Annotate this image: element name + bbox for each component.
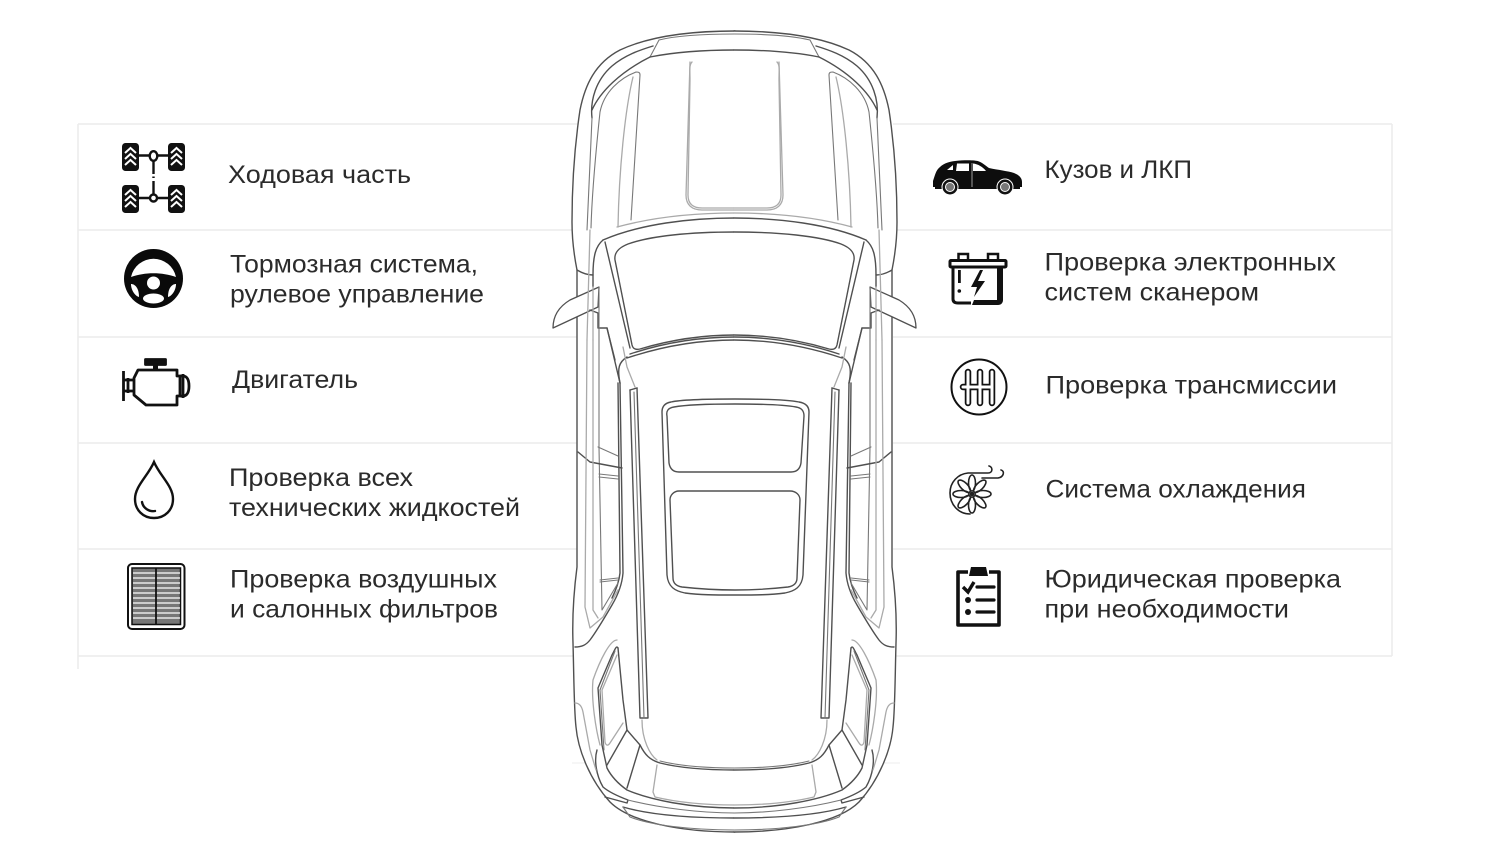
- icon: fluid drop: [135, 462, 173, 518]
- icon: air filter: [128, 564, 184, 629]
- label: Юридическая проверка: [1044, 566, 1341, 594]
- label: Проверка воздушных: [230, 566, 498, 594]
- label: Двигатель: [232, 366, 358, 394]
- icon: car side view: [933, 160, 1022, 195]
- row: fluids: [135, 462, 520, 522]
- row: electronic systems: систем сканером: [1044, 278, 1259, 306]
- label: Кузов и ЛКП: [1044, 156, 1192, 184]
- label: Проверка трансмиссии: [1046, 372, 1337, 400]
- icon: steering wheel: [124, 249, 183, 308]
- car top view illustration: [553, 31, 916, 832]
- row: electronic systems: [950, 248, 1337, 306]
- icon: car battery: [950, 254, 1006, 305]
- row: transmission: [952, 360, 1337, 414]
- icon: cooling fan: [950, 466, 1003, 514]
- label: Проверка всех: [229, 464, 414, 492]
- label: Система охлаждения: [1046, 476, 1306, 504]
- row: brakes and steering: [124, 249, 484, 308]
- row: engine: [124, 360, 358, 405]
- icon: engine: [124, 360, 189, 405]
- icon: gear shift pattern: [952, 360, 1006, 414]
- row: legal check: при необходимости: [1044, 596, 1289, 624]
- row: body and paint: [933, 156, 1192, 195]
- row: brakes and steering: рулевое управление: [230, 280, 484, 308]
- label: Ходовая часть: [228, 161, 411, 189]
- row: running gear: [123, 144, 411, 212]
- icon: chassis: [123, 144, 184, 212]
- row: fluids: технических жидкостей: [229, 494, 520, 522]
- row: legal check: [958, 566, 1341, 625]
- panoramic roof: [662, 399, 809, 595]
- row: filters: [128, 564, 498, 629]
- row: filters: и салонных фильтров: [230, 596, 498, 624]
- label: Тормозная система,: [230, 250, 478, 278]
- label: Проверка электронных: [1044, 248, 1337, 276]
- icon: clipboard checklist: [958, 567, 999, 625]
- row: cooling system: [950, 466, 1306, 514]
